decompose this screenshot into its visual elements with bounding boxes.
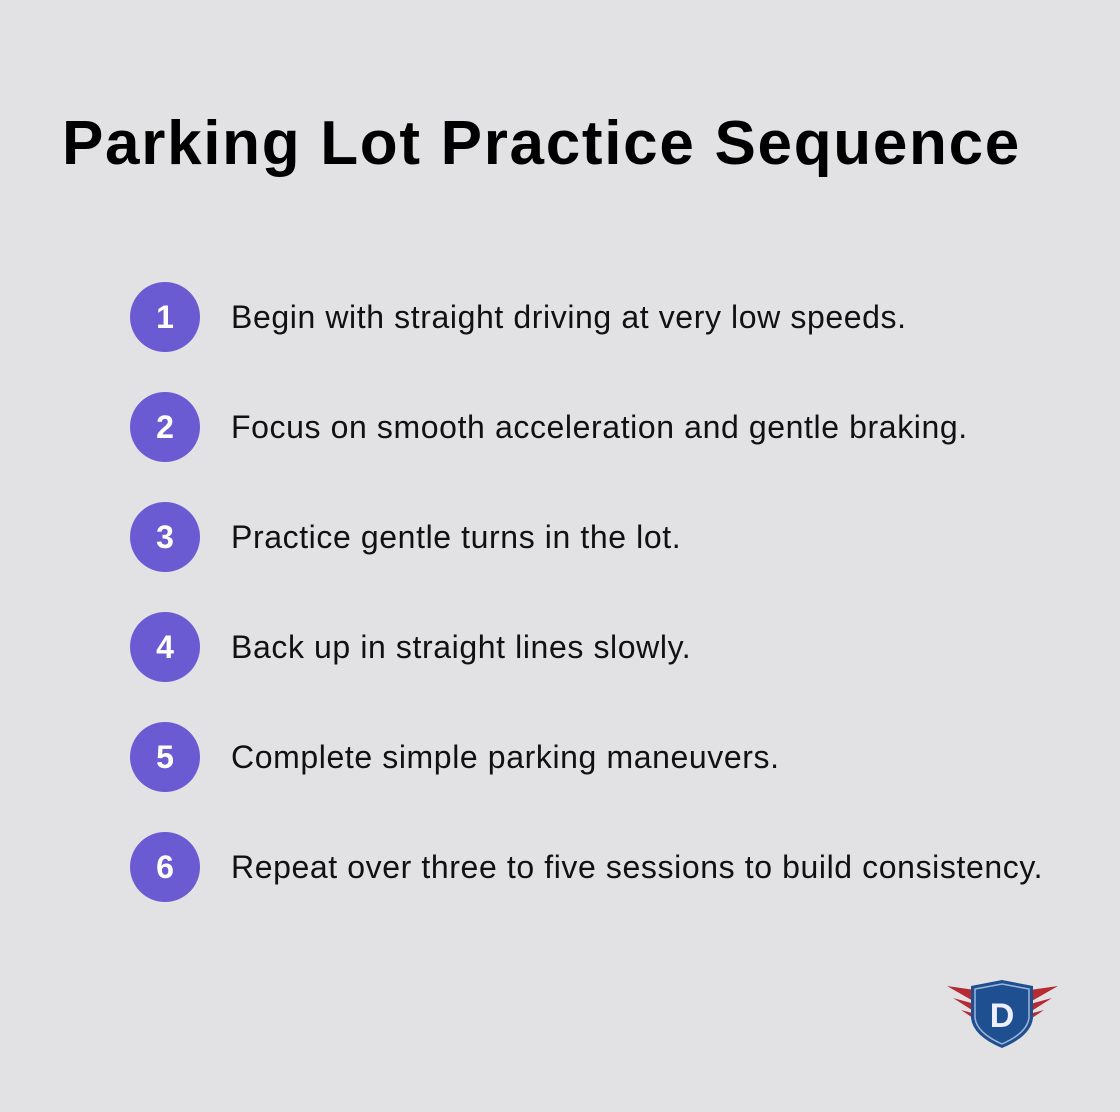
logo: shield with wings	[947, 980, 1058, 1048]
step 1: Begin with straight driving at very low speeds.	[231, 299, 907, 335]
step 5: Complete simple parking maneuvers.	[231, 739, 780, 775]
step 3	[130, 502, 681, 572]
step 4	[130, 612, 691, 682]
title: Parking Lot Practice Sequence	[62, 109, 1021, 178]
step 3: 3	[156, 519, 174, 555]
step 5	[130, 722, 780, 792]
step 4: Back up in straight lines slowly.	[231, 629, 691, 665]
step 2: Focus on smooth acceleration and gentle braking.	[231, 409, 968, 445]
logo: shield with wings: D	[990, 997, 1014, 1035]
step 1	[130, 282, 907, 352]
step 3: Practice gentle turns in the lot.	[231, 519, 681, 555]
step 4: 4	[156, 629, 174, 665]
step 6	[130, 832, 1043, 902]
step 5: 5	[156, 739, 174, 775]
step 6: 6	[156, 849, 174, 885]
step 1: 1	[156, 299, 174, 335]
step 2	[130, 392, 968, 462]
step 6: Repeat over three to five sessions to build consistency.	[231, 849, 1043, 885]
step 2: 2	[156, 409, 174, 445]
